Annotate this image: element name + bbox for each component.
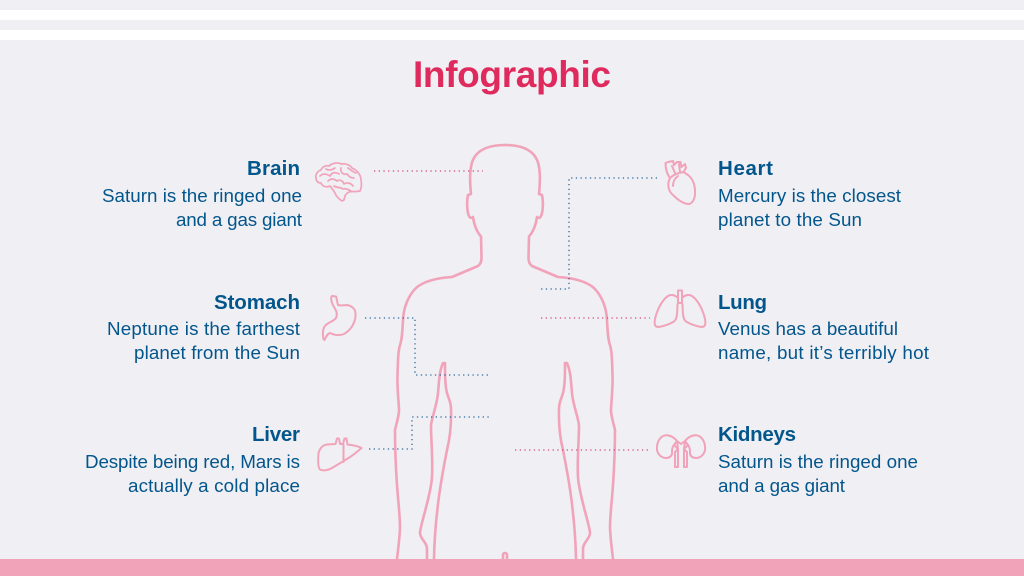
text: brain description: Saturn is the ringed one [102,185,302,206]
connector: stomach [365,318,488,375]
connector: kidneys [515,449,650,451]
text: lung description: Venus has a beautiful [718,318,898,339]
heading: lung: Lung [718,291,767,314]
connector: liver [369,417,489,449]
block: liver [85,423,300,496]
heading: stomach: Stomach [214,291,300,314]
connector: brain [374,170,483,172]
block: lung [718,291,930,363]
icon: kidneys [657,435,705,467]
text: stomach description: planet from the Sun [134,342,300,363]
connector: lung [541,317,650,319]
text: liver description: actually a cold place [128,475,300,496]
icon: heart [666,161,695,204]
text: lung description: name, but it’s terribly hot [718,342,930,363]
icon: stomach [323,296,356,340]
text: kidneys description [718,451,918,496]
text: heart description [718,185,902,230]
text: heart description: Mercury is the closest [718,185,902,206]
block: stomach [107,291,301,363]
block: brain [102,157,303,230]
text: heart description: planet to the Sun [718,209,862,230]
text: kidneys description: and a gas giant [718,475,846,496]
connector: heart [540,178,657,289]
text: kidneys description: Saturn is the ringed one [718,451,918,472]
text: brain description [102,185,303,230]
text: brain description: and a gas giant [176,209,303,230]
footer band [0,559,1024,576]
text: liver description [85,451,300,496]
heading: brain: Brain [247,157,300,180]
text: stomach description [107,318,301,363]
text: lung description [718,318,930,363]
body silhouette [395,145,615,559]
heading: kidneys: Kidneys [718,423,796,446]
block: heart [718,157,902,230]
title: Infographic [413,54,611,95]
heading: liver: Liver [252,423,300,446]
heading: heart: Heart [718,157,773,180]
icon: lung [655,290,705,327]
icon: brain [316,163,361,201]
block: kidneys [718,423,918,496]
text: stomach description: Neptune is the farthest [107,318,301,339]
icon: liver [318,438,362,470]
text: liver description: Despite being red, Mars is [85,451,300,472]
